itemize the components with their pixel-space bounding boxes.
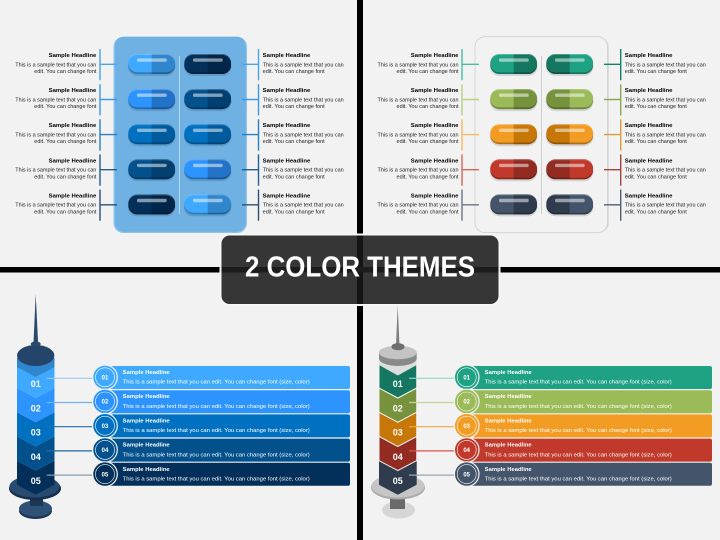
icon: grey syringe: 03 xyxy=(393,428,403,438)
left text blocks: edit. You can change font xyxy=(34,69,97,75)
number badges: 04 xyxy=(102,448,109,454)
left text blocks: Sample Headline xyxy=(411,88,458,94)
connector lines xyxy=(47,378,92,475)
right text blocks: edit. You can change font xyxy=(263,209,325,215)
left text blocks: This is a sample text that you can xyxy=(15,203,96,209)
left text blocks: edit. You can change font xyxy=(396,69,459,75)
right text blocks: This is a sample text that you can xyxy=(625,203,706,209)
icon: blue syringe: 05 xyxy=(31,476,41,486)
left text blocks: edit. You can change font xyxy=(396,139,459,145)
list text xyxy=(123,370,310,482)
left text blocks: edit. You can change font xyxy=(34,209,97,215)
left text blocks: This is a sample text that you can xyxy=(378,132,458,138)
right text blocks: Sample Headline xyxy=(263,193,310,199)
connector lines xyxy=(409,378,454,475)
left text blocks: This is a sample text that you can xyxy=(15,62,96,68)
left text blocks: edit. You can change font xyxy=(34,174,97,180)
right text blocks: This is a sample text that you can xyxy=(263,203,344,209)
icon: blue syringe: 03 xyxy=(31,428,41,438)
right text blocks: edit. You can change font xyxy=(263,174,325,180)
right pills column xyxy=(184,54,232,216)
list text: Sample Headline xyxy=(123,370,170,376)
panel: blue syringe theme xyxy=(9,294,350,519)
icon: blue syringe xyxy=(9,294,61,519)
right text blocks: Sample Headline xyxy=(625,88,672,94)
left pills column xyxy=(128,54,176,216)
list bars xyxy=(467,366,712,486)
list text: Sample Headline xyxy=(123,394,170,400)
number badges xyxy=(454,365,479,486)
right text blocks: Sample Headline xyxy=(263,123,310,129)
left text blocks: Sample Headline xyxy=(49,53,96,59)
left text blocks: This is a sample text that you can xyxy=(378,203,458,209)
right text blocks: Sample Headline xyxy=(625,193,672,199)
left text blocks: edit. You can change font xyxy=(34,104,97,110)
right connectors xyxy=(604,49,621,221)
right text blocks: edit. You can change font xyxy=(625,139,687,145)
panel: blue pill theme xyxy=(15,37,344,233)
number badges: 01 xyxy=(102,376,109,382)
right text blocks: edit. You can change font xyxy=(625,174,687,180)
list text: Sample Headline xyxy=(123,418,170,424)
right text blocks: Sample Headline xyxy=(625,123,672,129)
list bars xyxy=(105,366,350,486)
right text blocks: edit. You can change font xyxy=(263,139,325,145)
list text: Sample Headline xyxy=(485,443,532,449)
left text blocks xyxy=(15,53,97,215)
number badges: 03 xyxy=(463,424,471,430)
right text blocks: edit. You can change font xyxy=(625,209,687,215)
panel: multicolor pill theme xyxy=(378,37,706,233)
list text: This is a sample text that you can edit. You can change font (size, color) xyxy=(123,380,310,386)
right text blocks xyxy=(263,53,344,215)
left text blocks: Sample Headline xyxy=(411,158,458,164)
left text blocks: This is a sample text that you can xyxy=(15,132,96,138)
left text blocks: This is a sample text that you can xyxy=(15,97,96,103)
list text: This is a sample text that you can edit. You can change font (size, color) xyxy=(123,476,310,482)
icon: grey syringe: 02 xyxy=(393,403,403,413)
left text blocks: edit. You can change font xyxy=(396,174,459,180)
icon: blue syringe: 04 xyxy=(31,452,41,462)
right text blocks: This is a sample text that you can xyxy=(263,132,344,138)
right text blocks: This is a sample text that you can xyxy=(263,168,344,174)
list text: This is a sample text that you can edit. You can change font (size, color) xyxy=(123,404,310,410)
right text blocks: edit. You can change font xyxy=(263,104,325,110)
panel: multicolor syringe theme xyxy=(371,305,712,518)
number badges xyxy=(93,365,117,486)
title banner xyxy=(220,234,500,305)
left text blocks: Sample Headline xyxy=(49,193,96,199)
right text blocks: This is a sample text that you can xyxy=(263,97,344,103)
left connectors xyxy=(462,49,479,221)
icon: grey syringe: 05 xyxy=(393,476,403,486)
list text: This is a sample text that you can edit. You can change font (size, color) xyxy=(123,428,310,434)
left text blocks: Sample Headline xyxy=(49,158,96,164)
left text blocks: This is a sample text that you can xyxy=(378,168,458,174)
list text: Sample Headline xyxy=(485,394,532,400)
number badges: 02 xyxy=(463,400,471,406)
icon: grey syringe: 01 xyxy=(393,379,403,389)
icon: grey syringe xyxy=(371,305,425,518)
left text blocks: This is a sample text that you can xyxy=(378,97,458,103)
right connectors xyxy=(242,49,258,221)
right pills column xyxy=(546,54,594,216)
left text blocks: Sample Headline xyxy=(49,88,96,94)
icon: grey syringe: 04 xyxy=(393,452,403,462)
left text blocks xyxy=(378,53,459,215)
left text blocks: This is a sample text that you can xyxy=(378,62,458,68)
left text blocks: Sample Headline xyxy=(411,53,458,59)
left text blocks: edit. You can change font xyxy=(396,209,459,215)
right text blocks: Sample Headline xyxy=(263,88,310,94)
title banner: 2 COLOR THEMES xyxy=(245,252,475,284)
left text blocks: edit. You can change font xyxy=(396,104,459,110)
number badges: 03 xyxy=(102,424,109,430)
right text blocks: This is a sample text that you can xyxy=(263,62,344,68)
left text blocks: Sample Headline xyxy=(49,123,96,129)
left text blocks: Sample Headline xyxy=(411,193,458,199)
list text: This is a sample text that you can edit. You can change font (size, color) xyxy=(485,428,672,434)
list text: Sample Headline xyxy=(485,418,532,424)
icon: blue syringe: 01 xyxy=(31,379,41,389)
right text blocks: Sample Headline xyxy=(263,158,310,164)
blister card xyxy=(114,37,247,233)
right text blocks: Sample Headline xyxy=(625,158,672,164)
list text: Sample Headline xyxy=(123,443,170,449)
list text: This is a sample text that you can edit. You can change font (size, color) xyxy=(123,452,310,458)
list text: This is a sample text that you can edit. You can change font (size, color) xyxy=(485,380,672,386)
blister card xyxy=(475,37,609,233)
number badges: 05 xyxy=(102,472,109,478)
right text blocks: This is a sample text that you can xyxy=(625,132,706,138)
left text blocks: edit. You can change font xyxy=(34,139,97,145)
list text: This is a sample text that you can edit. You can change font (size, color) xyxy=(485,476,672,482)
list text xyxy=(485,370,672,482)
list text: Sample Headline xyxy=(485,467,532,473)
left text blocks: This is a sample text that you can xyxy=(15,168,96,174)
number badges: 05 xyxy=(463,472,471,478)
left pills column xyxy=(490,54,538,216)
right text blocks: This is a sample text that you can xyxy=(625,168,706,174)
number badges: 02 xyxy=(102,400,109,406)
right text blocks: This is a sample text that you can xyxy=(625,62,706,68)
right text blocks: edit. You can change font xyxy=(625,69,687,75)
number badges: 01 xyxy=(463,376,471,382)
list text: Sample Headline xyxy=(123,467,170,473)
icon: blue syringe: 02 xyxy=(31,403,41,413)
right text blocks: edit. You can change font xyxy=(625,104,687,110)
list text: This is a sample text that you can edit. You can change font (size, color) xyxy=(485,404,672,410)
right text blocks: This is a sample text that you can xyxy=(625,97,706,103)
right text blocks: edit. You can change font xyxy=(263,69,325,75)
left text blocks: Sample Headline xyxy=(411,123,458,129)
list text: Sample Headline xyxy=(485,370,532,376)
number badges: 04 xyxy=(463,448,471,454)
right text blocks: Sample Headline xyxy=(625,53,672,59)
right text blocks xyxy=(625,53,706,215)
left connectors xyxy=(100,49,117,221)
list text: This is a sample text that you can edit. You can change font (size, color) xyxy=(485,452,672,458)
right text blocks: Sample Headline xyxy=(263,53,310,59)
